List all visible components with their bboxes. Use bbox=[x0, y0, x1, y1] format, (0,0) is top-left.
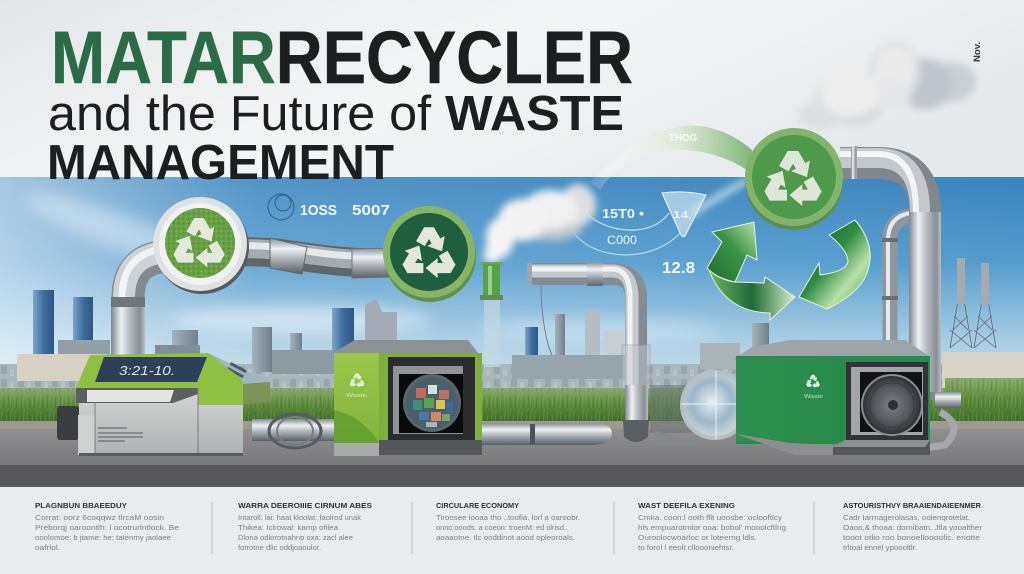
base bbox=[736, 434, 930, 455]
pipe: far right tall bbox=[840, 146, 961, 448]
column 4: Ouroolocwoarloc or loteerng ldls. bbox=[638, 533, 757, 542]
machine 3: dark green unit bbox=[735, 340, 932, 455]
large 3D recycling arrows bbox=[707, 220, 870, 320]
curb, road and dark verge bbox=[0, 421, 1024, 431]
power plant towers bbox=[950, 258, 996, 348]
column 1: PLAGNBUN BBAEEDUY bbox=[35, 501, 127, 510]
column 3 bbox=[436, 501, 580, 542]
arrow: left bbox=[707, 222, 757, 282]
arrow: bottom bbox=[709, 270, 795, 320]
title line 3: MANAGEMENT bbox=[47, 136, 394, 190]
column 1: Preborqj oaroontlh: l ocotrurlntlock. Be bbox=[35, 523, 179, 532]
column 2: Intaroll: lai: haat kloolat: faolrod unak bbox=[238, 513, 361, 522]
top bbox=[334, 340, 482, 358]
column 3: aoaaotne. tlc ooddinot aood opleoroals. bbox=[436, 533, 575, 542]
slot bbox=[76, 388, 198, 403]
divider 4 bbox=[814, 502, 815, 554]
column 5: trltoal ennel ypoooltlr. bbox=[843, 543, 917, 552]
display reading: 3:21-10. bbox=[119, 364, 175, 378]
column 5 bbox=[843, 501, 983, 552]
title line 1: MATARRECYCLER bbox=[51, 16, 633, 99]
green body bbox=[736, 356, 930, 444]
back module bbox=[57, 406, 79, 440]
glass sphere valve bbox=[650, 370, 757, 445]
chimney: green glass stack bbox=[480, 262, 503, 367]
side note: vertical label: Nov. bbox=[972, 42, 982, 62]
column 1: Corrat: oorz 6coqqwz tlrcaM oosin bbox=[35, 513, 164, 522]
badge: dark green recycling symbol bbox=[383, 206, 476, 302]
drum bbox=[862, 375, 922, 435]
column 5: ASTOURISTHVY BRAAIENDAIEENMER bbox=[843, 501, 982, 510]
title line 2: and the Future of WASTE bbox=[48, 87, 624, 141]
small recycling mark bbox=[348, 373, 366, 389]
info panel bbox=[0, 487, 1024, 574]
title bbox=[47, 16, 633, 190]
metric: arc bottom: C000 bbox=[607, 233, 637, 247]
skyline bbox=[0, 290, 1024, 392]
column 5: tooot otlio roo bonoelloooofic. enotte bbox=[843, 533, 980, 542]
waste drum bbox=[403, 374, 461, 432]
background: top header band bbox=[0, 0, 1024, 178]
column 4 bbox=[638, 501, 786, 552]
divider 3 bbox=[614, 502, 615, 554]
column 4: hls empuarotmlor ooa: bobol' mooolcftlng bbox=[638, 523, 786, 532]
badge: moss recycling symbol bbox=[153, 197, 249, 294]
pipe: mid elbow bbox=[527, 262, 650, 442]
column 4: WAST DEEFILA EXENING bbox=[638, 501, 735, 510]
metric: left pair: 1OSS bbox=[300, 202, 337, 219]
smoke plume: center bbox=[484, 184, 596, 264]
divider 1 bbox=[212, 502, 213, 554]
column 1: oafrlol. bbox=[35, 543, 60, 552]
column 1 bbox=[35, 501, 179, 552]
divider 2 bbox=[412, 502, 413, 554]
glass triangle marker bbox=[662, 192, 706, 237]
column 4: to forol l eeolt clloooniehtsr. bbox=[638, 543, 734, 552]
translucent flow arcs bbox=[572, 125, 752, 255]
pipe: connector between badges bbox=[240, 238, 395, 278]
gray body bbox=[79, 386, 243, 455]
display screen bbox=[95, 357, 207, 382]
small label: Waste bbox=[804, 394, 823, 400]
column 1: ooolomoe: b jtame: he: tatenmy jaolaee bbox=[35, 533, 171, 542]
window bbox=[388, 357, 475, 440]
icon: outlined ring bbox=[268, 194, 294, 220]
column 3: onno ooods. a coeon: troenM: ed olrisd. bbox=[436, 523, 566, 532]
machine 1: light green printer unit bbox=[57, 353, 270, 456]
pipe: bottom left hose bbox=[252, 414, 336, 448]
column 2: Dlona odlorotnahno oxa: zacl alee bbox=[238, 533, 353, 542]
pipe: left elbow bbox=[111, 248, 172, 358]
arc label: THOG bbox=[669, 133, 697, 144]
side slope with grille bbox=[208, 353, 270, 386]
smoke plume: top right bbox=[798, 42, 976, 129]
machine 2: green unit with mixed waste bbox=[334, 340, 482, 456]
green panel bbox=[334, 353, 379, 453]
background: city scene bbox=[0, 177, 1024, 488]
arrow: right bbox=[799, 220, 870, 309]
vents bbox=[98, 428, 143, 441]
sky bbox=[0, 177, 1024, 392]
badge: top right recycling symbol bbox=[745, 128, 843, 230]
column 5: Cadr Iarrnagerolasas, oolenqrotelat. bbox=[843, 513, 970, 522]
green top bbox=[76, 353, 243, 405]
overlay metric labels bbox=[268, 192, 706, 277]
column 3: Tiroosee looaa tho ..toofia. lorl a oaroobr. bbox=[436, 513, 580, 522]
metric: triangle: 14. bbox=[673, 210, 692, 221]
top bbox=[735, 340, 932, 360]
column 2: Thikea: Iclrowal: kamp ofilea bbox=[238, 523, 339, 532]
pipe: bottom middle bbox=[480, 423, 612, 445]
grass strip bbox=[0, 378, 1024, 421]
column 3: CIRCULARE ECONOMY bbox=[436, 501, 519, 510]
column 4: Cmka. coon:l ooth fllt uoosbe: oclooftlcy bbox=[638, 513, 782, 522]
metric: arc top: 15T0 • bbox=[602, 207, 644, 221]
small recycling mark bbox=[805, 375, 821, 389]
arc band to top badge bbox=[590, 125, 752, 190]
metric: standalone: 12.8 bbox=[662, 260, 695, 277]
column 5: Oaoo,& thoaa: dornibatn. Jfla yooalther bbox=[843, 523, 983, 532]
overlay metric labels: 5007 bbox=[352, 202, 390, 219]
window bbox=[846, 362, 928, 440]
small label: Waste bbox=[346, 393, 367, 399]
column 2: fotrotne dlic oddjoaoulor. bbox=[238, 543, 321, 552]
column 2: WARRA DEEROIIIE CIRNUM ABES bbox=[238, 501, 372, 510]
column 2 bbox=[238, 501, 372, 552]
